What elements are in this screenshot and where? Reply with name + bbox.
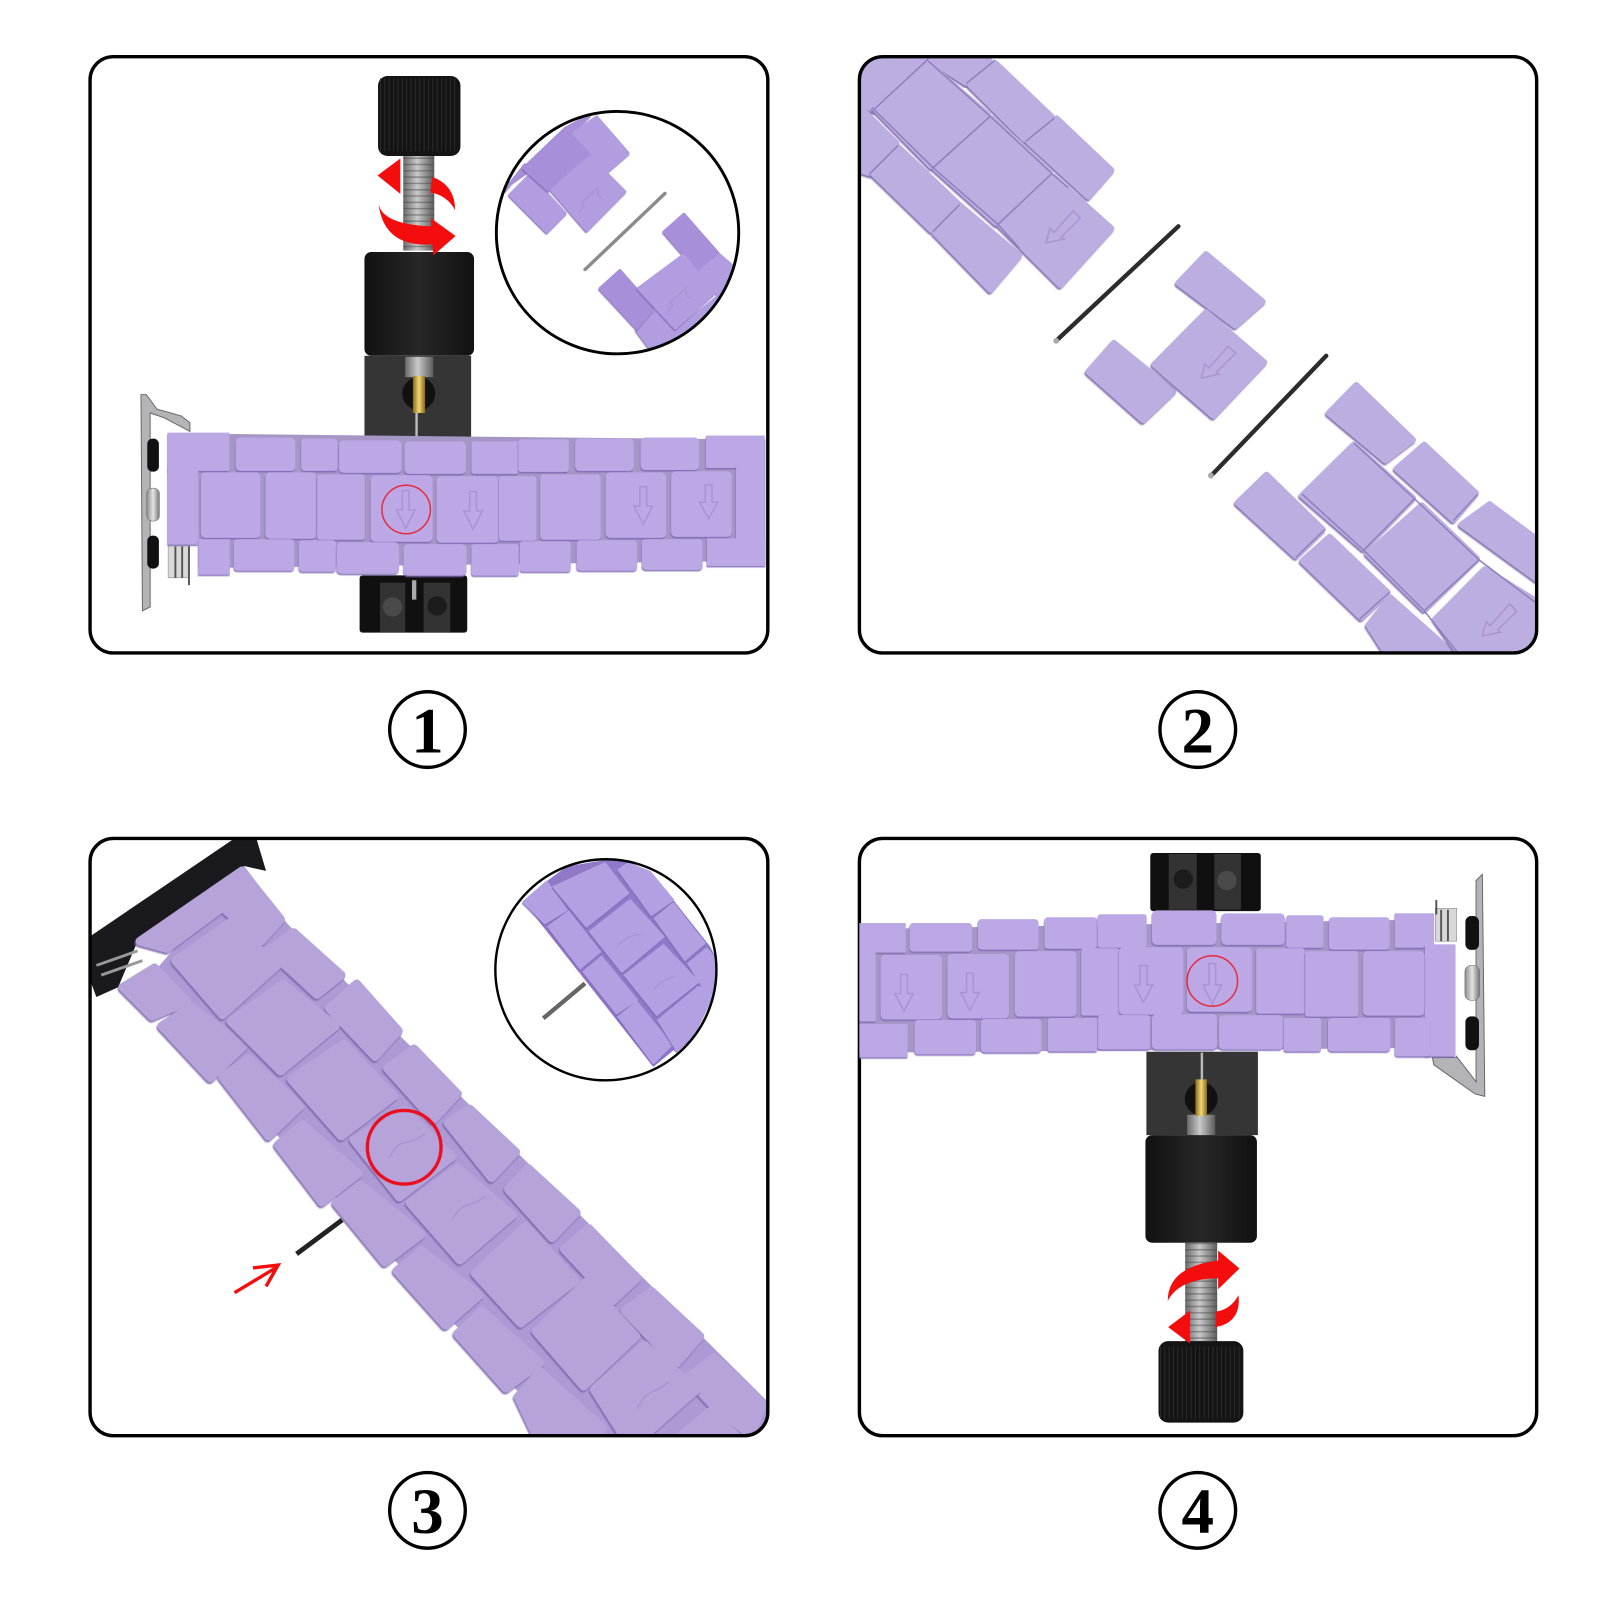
red circle highlight (382, 485, 430, 534)
step number 4 (1160, 1473, 1236, 1548)
panel 2 frame (859, 57, 1537, 653)
watch connector (1432, 874, 1485, 1096)
lower strap section (1238, 385, 1538, 655)
panel 1: pushing out the pin with the tool (90, 57, 768, 767)
step number 3: 3 (411, 1476, 444, 1548)
inset: link and pin detail (496, 111, 739, 354)
panel 1 frame (90, 57, 768, 653)
panel 4 frame (859, 838, 1537, 1436)
removed centre link (1088, 254, 1264, 420)
strap links (123, 866, 768, 1438)
inset: pin detail (495, 859, 717, 1080)
step number 1: 1 (411, 695, 444, 767)
panel 2 links (859, 58, 1538, 655)
lavender strap (168, 433, 765, 575)
panel 2: links and pins separated (859, 57, 1538, 767)
lavender strap (857, 911, 1455, 1057)
panel 4: pushing the pin back in (857, 838, 1537, 1548)
panel 3: strap with protruding pin (90, 838, 768, 1548)
step number 2 (1160, 692, 1236, 767)
panel 3 strap (90, 838, 768, 1438)
adjustment tool (360, 76, 474, 633)
black connector (90, 838, 266, 997)
red circle highlight (367, 1110, 441, 1184)
red circle highlight (1187, 956, 1238, 1006)
step number 1 (390, 692, 465, 767)
adjustment tool (1145, 853, 1261, 1423)
watch connector (141, 395, 190, 611)
red arrow pointing to pin (235, 1265, 278, 1293)
protruding pin (297, 1220, 342, 1254)
panel 3 frame (90, 838, 768, 1436)
upper strap section (859, 58, 1111, 290)
red rotation arrows (1168, 1251, 1239, 1344)
red rotation arrows (378, 158, 456, 255)
steel pins (1053, 226, 1326, 478)
step number 2: 2 (1182, 695, 1214, 767)
step number 3 (390, 1473, 465, 1548)
step number 4: 4 (1182, 1476, 1214, 1548)
